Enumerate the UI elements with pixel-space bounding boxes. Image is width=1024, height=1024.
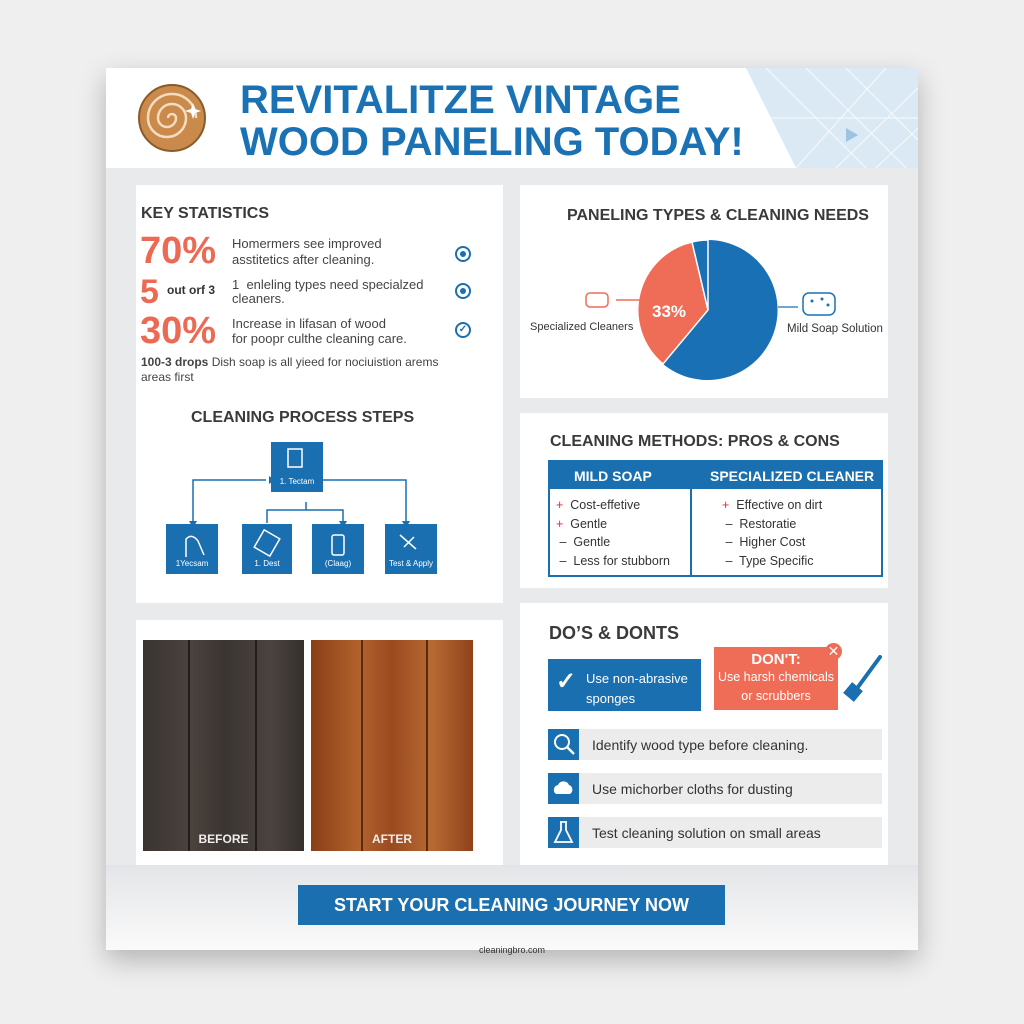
flowchart: Test & Apply [389,559,433,568]
table: – Type Specific [725,554,814,568]
pie chart: Mild Soap Solution [787,323,883,335]
flowchart: 1Yecsam [176,559,209,568]
title: REVITALITZE VINTAGE [240,78,681,122]
dont box: or scrubbers [741,689,811,703]
table: + Effective on dirt [722,498,822,512]
do box: ✓ [556,668,576,695]
tip rows [548,729,882,760]
panel: do's & don'ts: Use michorber cloths for dusting [592,781,793,797]
dont box [714,647,838,710]
flowchart: (Claag) [325,559,351,568]
icon: wood log [138,84,206,152]
icon: x: ✕ [828,643,839,659]
panel: do's & don'ts [520,603,888,865]
icon: ✓ [459,324,467,335]
heading: KEY STATISTICS [141,205,269,222]
table: – Higher Cost [725,535,805,549]
before image: BEFORE [198,832,248,846]
stat 5 out of 3: cleaners. [232,291,285,306]
table: – Restoratie [725,516,796,530]
bottom band [106,865,918,950]
card [106,68,918,950]
do box: sponges [586,691,635,706]
stat 5 out of 3: out orf 3 [167,283,215,297]
dont box: DON'T: [751,651,801,668]
after image [311,640,473,851]
pie chart [530,240,883,380]
table: + Gentle [556,516,607,530]
table: – Gentle [559,535,610,549]
icon [455,246,471,262]
panel: pros & cons: CLEANING METHODS: PROS & CONS [550,433,840,450]
stat 70%: Homermers see improved [232,236,382,251]
flowchart [166,442,437,574]
panel: paneling types pie: PANELING TYPES & CLEANING NEEDS [567,207,869,224]
panel: do's & don'ts: Test cleaning solution on small areas [592,825,821,841]
stat 5 out of 3 [140,273,471,311]
stat 70%: 70% [140,230,216,272]
stat 70% [140,230,471,272]
icon: brush [843,654,882,702]
stat 30%: Increase in lifasan of wood [232,316,386,331]
icon: x [825,643,842,660]
after image: AFTER [372,832,412,846]
panel: pros & cons [520,413,888,588]
flowchart: 1. Dest [254,559,280,568]
heading process: CLEANING PROCESS STEPS [191,409,414,426]
pie chart: 33% [652,302,686,321]
CTA button: START YOUR CLEANING JOURNEY NOW [334,895,689,915]
footer: cleaningbro.com [479,945,545,955]
stat 70%: asstitetics after cleaning. [232,252,374,267]
icon [455,322,471,338]
table: – Less for stubborn [559,554,670,568]
table: SPECIALIZED CLEANER [710,468,874,484]
do box [548,659,701,711]
title [240,78,744,164]
table [548,460,883,577]
dont box: Use harsh chemicals [718,670,834,684]
stat 30% [140,310,471,352]
title: WOOD PANELING TODAY! [240,120,744,164]
before image [143,640,304,851]
CTA button [298,885,725,925]
stat 30%: 30% [140,310,216,352]
pie chart: Specialized Cleaners [530,321,634,333]
panel: paneling types pie [520,185,888,398]
flowchart: 1. Tectam [280,477,315,486]
panel: key statistics & process [136,185,503,603]
stat 30%: for poopr culthe cleaning care. [232,331,407,346]
note: 100-3 drops Dish soap is all yieed for nociuistion arems areas first [141,355,438,384]
do box: Use non-abrasive [586,671,688,686]
stat 5 out of 3: 1 enleling types need specialzed [232,277,424,292]
table: MILD SOAP [574,468,652,484]
tip rows: Identify wood type before cleaning. [592,737,808,753]
stat 5 out of 3: 5 [140,273,159,311]
panel: before/after [136,620,503,865]
decorative pattern [746,68,918,168]
panel: do's & don'ts: DO’S & DONTS [549,623,679,643]
table: + Cost-effetive [556,498,640,512]
step boxes [271,442,323,492]
header [106,68,918,168]
icon [455,283,471,299]
